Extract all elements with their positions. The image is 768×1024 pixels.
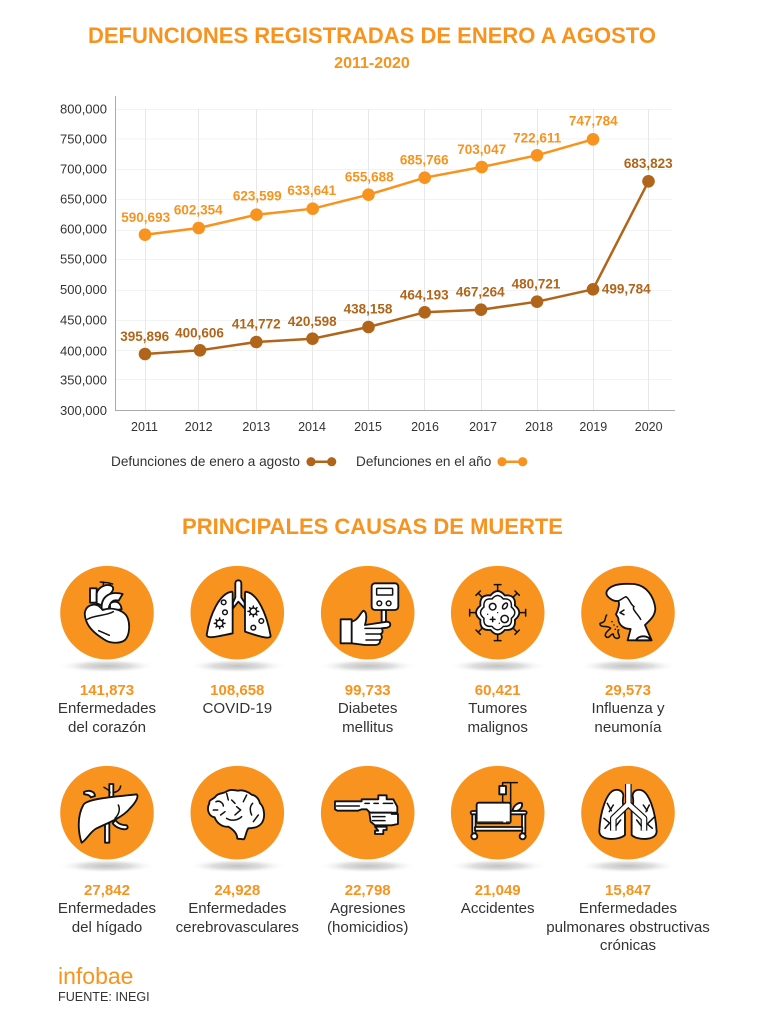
icon: hospital bed: [471, 783, 527, 839]
cause: accidentes: [448, 766, 548, 917]
cause: enfermedades del hígado: [57, 766, 157, 936]
label: Diabetes: [338, 700, 397, 717]
label: Agresiones: [330, 900, 405, 917]
label: Accidentes: [461, 900, 535, 917]
data labels: en el año: 722,611: [513, 130, 562, 145]
cause: enfermedades pulmonares obstructivas crónicas: [546, 766, 710, 954]
data labels: en el año: 633,641: [287, 183, 337, 198]
value: 21,049: [475, 882, 521, 899]
label: COVID-19: [202, 700, 272, 717]
legend: Defunciones en el año: [356, 454, 491, 469]
label: del corazón: [68, 719, 146, 736]
data labels: en el año: [121, 114, 618, 225]
x axis labels: 2018: [525, 420, 553, 434]
icon: heart: [85, 582, 129, 643]
cause: diabetes mellitus: [318, 566, 418, 736]
data labels: enero a agosto: 414,772: [232, 317, 281, 332]
label: (homicidios): [327, 919, 408, 936]
cause: influenza y neumonía: [578, 566, 678, 736]
data labels: en el año: 590,693: [121, 210, 171, 225]
label: mellitus: [342, 719, 393, 736]
cause: agresiones: [318, 766, 418, 936]
data labels: enero a agosto: 499,784: [602, 282, 651, 297]
label: Influenza y: [592, 700, 664, 717]
data labels: enero a agosto: 420,598: [288, 314, 337, 329]
legend: [111, 454, 527, 469]
source: FUENTE: INEGI: [58, 990, 150, 1004]
cause: enfermedades del corazón: [57, 566, 157, 736]
label: Tumores: [468, 700, 527, 717]
series: defunciones en el año: [139, 133, 599, 241]
data labels: enero a agosto: 438,158: [344, 302, 393, 317]
data labels: en el año: 685,766: [400, 152, 449, 167]
label: Enfermedades: [188, 900, 286, 917]
label: Enfermedades: [58, 900, 156, 917]
x axis labels: 2016: [411, 420, 439, 434]
logo: infobae: infobae: [58, 963, 133, 989]
y axis labels: 350,000: [60, 372, 107, 388]
y axis labels: 800,000: [60, 102, 107, 116]
data labels: en el año: 747,784: [569, 114, 618, 129]
subtitle: 2011-2020: [334, 55, 410, 72]
icon: lungs with virus: [207, 580, 271, 638]
data labels: en el año: 602,354: [174, 202, 223, 217]
x axis labels: 2020: [635, 420, 663, 434]
value: 99,733: [345, 682, 391, 699]
y axis labels: 500,000: [60, 282, 107, 297]
data labels: enero a agosto: 400,606: [175, 325, 224, 340]
data labels: enero a agosto: 464,193: [400, 287, 449, 302]
y axis labels: [60, 102, 107, 418]
x axis labels: 2013: [242, 420, 270, 434]
value: 22,798: [345, 882, 391, 899]
icon: hand with gun: [335, 795, 398, 834]
data labels: enero a agosto: 480,721: [512, 277, 561, 292]
label: cerebrovasculares: [176, 919, 299, 936]
data labels: en el año: 655,688: [345, 170, 394, 185]
label: Enfermedades: [579, 900, 677, 917]
section heading: PRINCIPALES CAUSAS DE MUERTE: [182, 514, 563, 539]
label: Enfermedades: [58, 700, 156, 717]
icon: brain: [208, 790, 264, 839]
label: malignos: [467, 719, 528, 736]
x axis labels: 2017: [469, 420, 497, 434]
label: crónicas: [600, 937, 656, 954]
icon: glucose meter and hand: [341, 583, 398, 645]
label: pulmonares obstructivas: [546, 919, 710, 936]
value: 141,873: [80, 682, 134, 699]
x axis labels: 2014: [298, 420, 326, 434]
x axis labels: 2019: [579, 420, 607, 434]
data labels: en el año: 703,047: [457, 142, 506, 157]
y axis labels: 450,000: [60, 312, 107, 328]
icon: person coughing: [600, 584, 655, 640]
y axis labels: 600,000: [60, 222, 107, 236]
data labels: en el año: 623,599: [233, 189, 282, 204]
x axis labels: 2012: [185, 420, 213, 434]
y axis labels: 750,000: [60, 132, 107, 146]
x axis labels: [131, 420, 663, 434]
y axis labels: 300,000: [60, 403, 107, 418]
label: neumonía: [594, 719, 662, 736]
label: del hígado: [72, 919, 142, 936]
x axis labels: 2011: [131, 420, 158, 434]
value: 60,421: [475, 682, 521, 699]
value: 29,573: [605, 682, 651, 699]
data labels: enero a agosto: 395,896: [120, 329, 170, 344]
value: 24,928: [214, 882, 260, 899]
value: 15,847: [605, 882, 651, 899]
icon: liver: [79, 784, 137, 843]
cause: enfermedades cerebrovasculares: [176, 766, 299, 936]
icon: lungs with bronchi: [599, 784, 657, 839]
y axis labels: 650,000: [60, 192, 107, 206]
line chart: [60, 96, 675, 434]
y axis labels: 700,000: [60, 162, 107, 176]
data labels: enero a agosto: [120, 156, 673, 344]
data labels: enero a agosto: 467,264: [456, 285, 505, 300]
value: 27,842: [84, 882, 130, 899]
y axis labels: 400,000: [60, 344, 107, 358]
data labels: enero a agosto: 683,823: [624, 156, 673, 171]
legend: Defunciones de enero a agosto: [111, 454, 300, 469]
value: 108,658: [210, 682, 264, 699]
x axis labels: 2015: [354, 420, 382, 434]
cause: tumores malignos: [448, 566, 548, 736]
y axis labels: 550,000: [60, 252, 107, 266]
icon: tumor cell: [470, 585, 526, 641]
title: DEFUNCIONES REGISTRADAS DE ENERO A AGOSTO: [88, 23, 656, 48]
cause: covid-19: [187, 566, 287, 717]
series: defunciones de enero a agosto: [139, 175, 655, 360]
